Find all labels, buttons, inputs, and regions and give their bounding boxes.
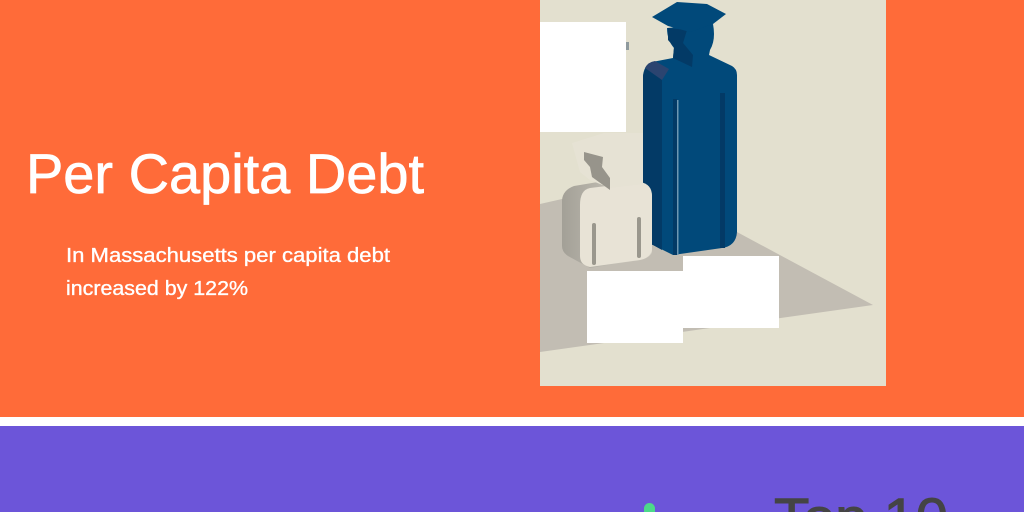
text block: debt increase: increased by 122%: [66, 278, 248, 300]
white masked box: top left: [540, 22, 626, 132]
small residual mark: [626, 42, 629, 50]
illustration: graduate and non-graduate figures: [540, 0, 886, 386]
text block: debt increase: In Massachusetts per capita debt: [66, 245, 390, 267]
text block: debt increase: [66, 245, 390, 300]
illustration background: [540, 0, 886, 386]
figure shadow: [540, 199, 873, 352]
white masked box: bottom right: [683, 256, 779, 328]
white masked box: bottom left: [587, 271, 683, 343]
cream non-graduate figure: [562, 133, 652, 268]
blue graduate figure: [643, 2, 737, 255]
title: Per Capita Debt: [26, 142, 424, 205]
panel: purple section: [0, 426, 1024, 512]
icon: green marker (cropped): [644, 503, 655, 512]
